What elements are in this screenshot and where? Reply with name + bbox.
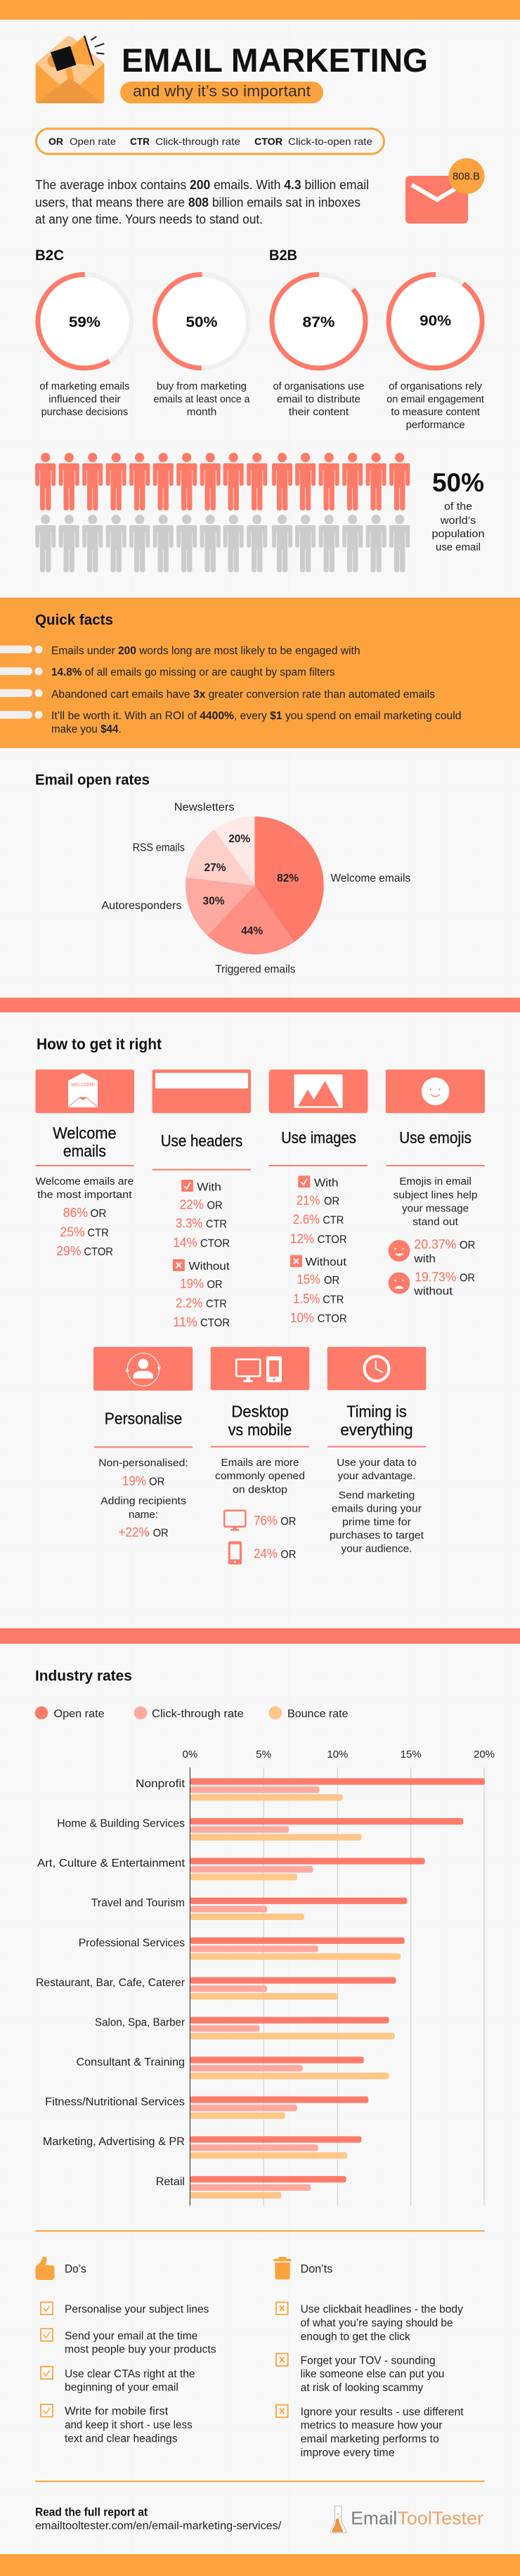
don't list: of what you’re saying should be <box>301 2317 453 2329</box>
x axis labels <box>183 1749 495 1760</box>
heading: B2C: B2C <box>35 247 64 264</box>
donut: 50%: month <box>187 407 216 418</box>
card title: Use emojis <box>399 1128 472 1147</box>
icon: welcome envelope: WELCOME <box>71 1081 95 1088</box>
don't list: like someone else can put you <box>301 2369 444 2381</box>
card text <box>98 1457 188 1540</box>
bounce rate bars <box>190 1794 401 2198</box>
icon: thumbs up <box>35 2257 55 2280</box>
footer: report link <box>35 2505 282 2532</box>
slice values: 27% <box>204 862 226 874</box>
stats without headers: 19% <box>180 1277 204 1291</box>
slice labels: Newsletters <box>174 801 235 813</box>
donut: 50%: buy from marketing <box>157 381 247 392</box>
don't list: improve every time <box>301 2447 395 2459</box>
donut: 59%: influenced their <box>48 394 121 406</box>
stats with images: OR <box>324 1195 339 1207</box>
card text: OR <box>153 1528 169 1540</box>
stats with headers: CTOR <box>200 1238 230 1250</box>
fact list: make you $44. <box>51 723 122 735</box>
icon: envelope with megaphone <box>36 36 104 103</box>
card title: Use images <box>281 1128 356 1147</box>
icon: envelope with 808.B badge <box>405 158 485 224</box>
stats without images: 10% <box>290 1311 314 1325</box>
card text: your message <box>402 1204 469 1215</box>
stat: desktop 76% <box>224 1510 296 1531</box>
subtitle pill <box>120 82 323 103</box>
slice values: 82% <box>277 872 299 884</box>
stats without images: 1.5% <box>293 1292 320 1306</box>
icon: flask <box>330 2506 346 2532</box>
donut: 87%: email to distribute <box>277 394 360 406</box>
card: timing is everything <box>327 1347 426 1554</box>
intro text: users, that means there are 808 billion emails sat in inboxes <box>35 195 360 210</box>
category labels <box>36 1778 186 2188</box>
category labels: Salon, Spa, Barber <box>95 2016 186 2029</box>
card title: Personalise <box>105 1409 182 1427</box>
title: EMAIL MARKETING <box>122 41 428 79</box>
card title: everything <box>340 1420 413 1438</box>
do list: Send your email at the time <box>65 2330 197 2342</box>
don't list: at risk of looking scammy <box>301 2382 423 2394</box>
card text: Use your data to <box>337 1457 417 1469</box>
donut: 90%: of organisations rely <box>389 381 483 392</box>
stats without headers: CTR <box>206 1298 227 1310</box>
footer: report link: Read the full report at <box>35 2505 148 2518</box>
pie chart: email open rates <box>101 801 410 975</box>
stat: 50% use email: 50% <box>432 468 484 497</box>
heading: do's: Do’s <box>65 2263 86 2276</box>
stats without images: OR <box>324 1275 339 1287</box>
stat: 50% use email: population <box>431 528 485 540</box>
stats with headers: CTR <box>206 1218 227 1230</box>
bullet markers <box>0 645 42 719</box>
stats with headers <box>173 1180 230 1250</box>
stat: mobile 24%: OR <box>280 1549 296 1561</box>
bottom band <box>0 2554 520 2576</box>
top band <box>0 0 520 20</box>
coral band <box>0 1628 520 1644</box>
don't list <box>276 2302 464 2459</box>
stat: 50% use email <box>431 468 485 553</box>
card text <box>330 1457 424 1554</box>
icon: clock <box>364 1356 389 1381</box>
panel: don'ts <box>273 2257 464 2459</box>
card text: purchases to target <box>330 1530 424 1541</box>
emoji stat: with: OR <box>460 1239 475 1251</box>
don't list: enough to get the click <box>301 2331 410 2343</box>
card title: Desktop <box>231 1403 289 1421</box>
icon: header bar <box>155 1073 248 1088</box>
donut: 59%: of marketing emails <box>39 381 129 392</box>
do list <box>41 2302 216 2445</box>
heading: email open rates: Email open rates <box>35 771 150 788</box>
icon: picture <box>294 1074 343 1108</box>
card text: 29% <box>56 1244 82 1258</box>
donut: 50%: 50% <box>186 314 218 330</box>
legend: metric abbreviations: Open rate <box>70 136 116 147</box>
card text: 25% <box>60 1225 85 1239</box>
slice labels: RSS emails <box>133 842 185 854</box>
slice labels: Triggered emails <box>215 963 295 975</box>
legend: metric abbreviations: Click-to-open rate <box>288 136 372 147</box>
category labels: Fitness/Nutritional Services <box>45 2097 185 2108</box>
card: use headers <box>152 1069 251 1329</box>
do list: most people buy your products <box>65 2344 216 2356</box>
card text: on desktop <box>233 1484 287 1495</box>
panel: header <box>36 36 428 103</box>
stat: 50% use email: use email <box>436 541 481 553</box>
card text: the most important <box>37 1190 132 1201</box>
stat: 50% use email: world’s <box>440 515 476 527</box>
card title: Welcome <box>53 1123 117 1142</box>
stats with headers: 14% <box>173 1236 197 1250</box>
logo: EmailToolTester: Email <box>351 2508 397 2529</box>
don't list: email marketing performs to <box>301 2433 439 2445</box>
stats without images: 15% <box>297 1273 320 1287</box>
do list: beginning of your email <box>65 2382 178 2394</box>
card text: 86% <box>63 1206 88 1220</box>
donut: 87%: of organisations use <box>273 381 364 392</box>
icon: monitor and phone <box>236 1356 282 1382</box>
icon: envelope with 808.B badge: 808.B <box>453 172 480 183</box>
emoji stat: with: with <box>413 1254 436 1266</box>
card text: Non-personalised: <box>98 1457 188 1469</box>
stats without images <box>290 1255 347 1325</box>
card text: stand out <box>412 1217 458 1228</box>
stats with images: 12% <box>290 1232 314 1246</box>
donut: 59%: 59% <box>69 314 100 330</box>
card title: Use headers <box>161 1132 242 1150</box>
category labels: Travel and Tourism <box>91 1898 185 1910</box>
donut: 90%: 90% <box>420 312 451 329</box>
slice labels: Autoresponders <box>101 900 182 912</box>
open rate bars <box>190 1778 485 2182</box>
do list: and keep it short - use less <box>65 2419 193 2431</box>
legend: metric abbreviations: CTOR <box>254 136 282 147</box>
card text: Adding recipients <box>100 1496 186 1507</box>
donut: 59%: purchase decisions <box>41 407 128 418</box>
stat: desktop 76%: 76% <box>254 1514 278 1528</box>
stats with headers: With <box>197 1181 221 1193</box>
emoji stat: without <box>389 1270 475 1298</box>
category labels: Home & Building Services <box>57 1818 185 1830</box>
category labels: Marketing, Advertising & PR <box>43 2136 185 2148</box>
card: use emojis <box>386 1069 485 1298</box>
stats without images: CTR <box>323 1294 344 1306</box>
logo: EmailToolTester: ToolTester <box>397 2508 483 2529</box>
icon: welcome envelope <box>68 1073 98 1107</box>
donut: 90%: on email engagement <box>386 394 484 406</box>
slice values: 44% <box>241 925 263 937</box>
do list: Personalise your subject lines <box>65 2304 209 2316</box>
emoji stat: without: 19.73% <box>415 1270 456 1284</box>
card text: CTR <box>87 1227 109 1239</box>
chart legend: Bounce rate <box>287 1708 349 1720</box>
card title: Timing is <box>346 1403 407 1421</box>
card title: emails <box>63 1142 106 1160</box>
icon: trash can <box>273 2257 291 2279</box>
stats without images: Without <box>306 1256 347 1268</box>
heading: B2B: B2B <box>269 247 297 264</box>
fact list: It’ll be worth it. With an ROI of 4400%, every $1 you spend on email marketing could <box>51 710 461 722</box>
card title: vs mobile <box>228 1420 292 1438</box>
legend: metric abbreviations: OR <box>48 136 63 147</box>
stats without headers: Without <box>188 1261 230 1273</box>
panel: quick facts <box>0 598 520 748</box>
stats without headers: CTOR <box>200 1317 230 1329</box>
card text: emails during your <box>332 1503 422 1514</box>
bar chart: industry rates <box>36 1749 495 2205</box>
card text: +22% <box>118 1526 150 1540</box>
fact list <box>51 645 461 735</box>
card text <box>36 1176 134 1258</box>
don't list: metrics to measure how your <box>301 2420 443 2432</box>
card title <box>340 1403 413 1438</box>
stats with headers: OR <box>207 1199 223 1211</box>
stats with headers: 22% <box>180 1197 204 1211</box>
do list: Write for mobile first <box>65 2406 169 2418</box>
stats without images: CTOR <box>318 1313 347 1325</box>
category labels: Professional Services <box>79 1937 185 1949</box>
stat: mobile 24% <box>228 1541 296 1564</box>
card text: name: <box>129 1509 158 1521</box>
subtitle pill: and why it’s so important <box>133 82 311 100</box>
do list: text and clear headings <box>65 2433 178 2445</box>
category labels: Art, Culture & Entertainment <box>37 1857 186 1869</box>
stats without headers: 2.2% <box>176 1296 202 1310</box>
legend: metric abbreviations: Click-through rate <box>155 136 240 147</box>
card text: your advantage. <box>337 1471 416 1482</box>
stats with images: CTOR <box>318 1234 347 1246</box>
emoji stat: with <box>389 1237 475 1266</box>
donut: 50% <box>152 272 251 418</box>
do list: Use clear CTAs right at the <box>65 2368 195 2380</box>
x axis labels: 5% <box>256 1749 271 1760</box>
donut: 87%: their content <box>289 407 349 418</box>
category labels: Retail <box>156 2176 185 2188</box>
heading: how to get it right: How to get it right <box>37 1036 162 1053</box>
donut: 87%: 87% <box>302 314 334 330</box>
stats without headers: 11% <box>173 1315 197 1329</box>
slice labels <box>101 801 410 975</box>
donut: 90% <box>386 272 485 431</box>
slice values: 30% <box>202 896 225 908</box>
stat: mobile 24%: 24% <box>254 1547 278 1561</box>
chart legend <box>35 1706 349 1720</box>
stats with images: 21% <box>297 1193 320 1207</box>
category labels: Nonprofit <box>136 1778 186 1790</box>
click-through rate bars <box>190 1786 319 2191</box>
donut: 90%: to measure content <box>391 407 480 418</box>
heading: quick facts: Quick facts <box>35 612 113 629</box>
stats with images: With <box>314 1177 338 1189</box>
intro text: at any one time. Yours needs to stand out. <box>35 212 263 226</box>
card title <box>228 1403 292 1438</box>
don't list: Forget your TOV - sounding <box>301 2355 436 2366</box>
card text: your audience. <box>342 1543 412 1554</box>
legend: metric abbreviations: CTR <box>130 136 150 147</box>
slice values <box>202 833 299 937</box>
heading: industry rates: Industry rates <box>35 1668 132 1685</box>
fact list: Abandoned cart emails have 3x greater conversion rate than automated emails <box>51 688 435 700</box>
emoji stat: without: OR <box>460 1272 475 1284</box>
pictogram: grey people row <box>35 515 410 572</box>
card text: 19% <box>122 1474 146 1488</box>
x axis labels: 15% <box>401 1749 422 1760</box>
fact list: 14.8% of all emails go missing or are caught by spam filters <box>51 666 335 678</box>
x axis labels: 20% <box>474 1749 495 1760</box>
logo: EmailToolTester <box>330 2506 483 2532</box>
emoji stat: without: without <box>413 1286 453 1298</box>
stats without headers <box>173 1259 230 1329</box>
card: welcome emails <box>35 1069 134 1258</box>
slice labels: Welcome emails <box>330 872 410 884</box>
stat: 50% use email: of the <box>444 501 472 513</box>
stats with headers: 3.3% <box>176 1216 202 1230</box>
stats with images: CTR <box>323 1215 344 1227</box>
slice values: 20% <box>228 833 250 845</box>
icon: person in cycle <box>126 1353 161 1386</box>
chart legend: Click-through rate <box>152 1708 244 1720</box>
card text: Emojis in email <box>399 1176 472 1187</box>
x axis labels: 10% <box>327 1749 348 1760</box>
chart legend: Open rate <box>53 1708 105 1720</box>
card text: Welcome emails are <box>36 1176 134 1187</box>
category labels: Consultant & Training <box>76 2056 185 2068</box>
pictogram: coral people row <box>35 453 410 510</box>
donut: 59% <box>35 272 134 418</box>
donut: 90%: performance <box>406 420 465 431</box>
stat: desktop 76%: OR <box>280 1516 296 1528</box>
don't list: Ignore your results - use different <box>301 2406 464 2418</box>
card text <box>394 1176 478 1228</box>
card text: Send marketing <box>339 1490 415 1501</box>
fact list: Emails under 200 words long are most likely to be engaged with <box>51 645 360 657</box>
intro text: The average inbox contains 200 emails. With 4.3 billion email <box>35 178 369 192</box>
card text: OR <box>90 1208 107 1220</box>
card text: Emails are more <box>221 1457 299 1469</box>
intro text <box>35 178 369 226</box>
footer: report link: emailtooltester.com/en/email-marketing-services/ <box>35 2520 282 2532</box>
don't list: Use clickbait headlines - the body <box>301 2304 463 2316</box>
donut: 87% <box>270 272 368 418</box>
card text: OR <box>149 1476 164 1488</box>
card text: prime time for <box>342 1516 411 1528</box>
card: use images <box>269 1069 368 1325</box>
card title <box>53 1123 117 1160</box>
panel: do's <box>35 2257 216 2445</box>
card text <box>215 1457 305 1495</box>
heading: don'ts: Don’ts <box>301 2263 332 2276</box>
icon: smiley <box>422 1078 449 1105</box>
card: personalise <box>93 1347 193 1540</box>
card text: commonly opened <box>215 1471 305 1482</box>
stats with images: 2.6% <box>293 1213 320 1227</box>
card text: subject lines help <box>394 1190 478 1201</box>
x axis labels: 0% <box>183 1749 197 1760</box>
card: desktop vs mobile <box>211 1347 309 1564</box>
category labels: Restaurant, Bar, Cafe, Caterer <box>36 1977 186 1989</box>
stats without headers: OR <box>207 1279 223 1291</box>
emoji stat: with: 20.37% <box>414 1237 456 1251</box>
legend: metric abbreviations <box>37 129 384 154</box>
coral band <box>0 998 520 1012</box>
donut: 50%: emails at least once a <box>153 394 250 406</box>
stats with images <box>290 1176 347 1246</box>
card text: CTOR <box>84 1246 113 1258</box>
